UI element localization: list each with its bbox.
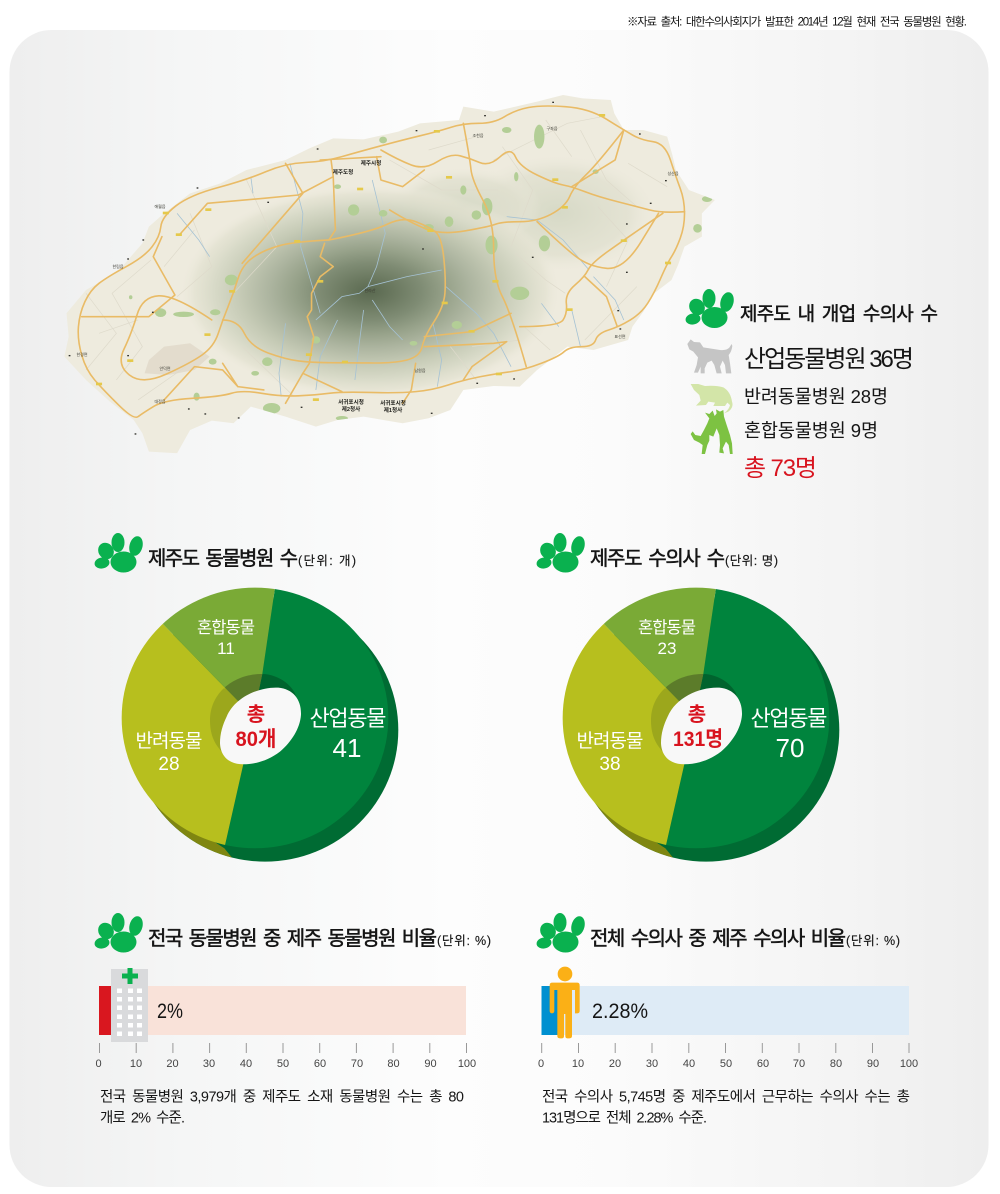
axis: 50 (277, 1058, 289, 1070)
axis: 100 (458, 1058, 476, 1070)
section: Jeju share of national veterinarians (536, 913, 918, 1126)
donut total: 131명 (673, 728, 723, 751)
map place labels: 한림읍 (112, 263, 124, 269)
bar value: 2.28% (592, 1000, 648, 1023)
icon: paw (94, 533, 145, 572)
description: 개로 2% 수준. (100, 1110, 185, 1126)
map place labels: 제1청사 (384, 406, 403, 414)
bar value: 2% (157, 1000, 183, 1023)
axis: 20 (166, 1058, 179, 1070)
donut total: 총 (688, 703, 706, 726)
slice label: industrial (310, 706, 386, 763)
map place labels: 제주도청 (333, 168, 353, 176)
icon: rat (691, 384, 733, 413)
unit: (단위: %) (846, 934, 900, 948)
icon: paw (94, 913, 145, 952)
slice label: industrial: 70 (776, 733, 804, 763)
axis: 70 (793, 1058, 805, 1070)
map of Jeju island (64, 95, 714, 453)
axis: 80 (387, 1058, 400, 1070)
slice label: mixed (197, 618, 255, 658)
icon: paw (536, 913, 587, 952)
section: veterinarians in Jeju (536, 533, 854, 870)
axis: 50 (720, 1058, 732, 1070)
map place labels: 제주시청 (361, 159, 381, 167)
slice label: industrial (750, 706, 828, 763)
axis: 100 (900, 1058, 918, 1070)
donut chart: hospitals (122, 588, 398, 862)
map place labels: 구좌읍 (546, 125, 558, 131)
bar chart: veterinarian share (538, 967, 918, 1070)
axis: 10 (130, 1058, 142, 1070)
map place labels: 조천읍 (472, 132, 484, 138)
axis (95, 1043, 476, 1070)
axis: 20 (609, 1058, 621, 1070)
section: Jeju share of national hospitals (94, 913, 491, 1126)
icon: cat (687, 339, 732, 373)
map place labels: 표선면 (614, 333, 626, 339)
description (542, 1088, 910, 1126)
map place labels (76, 125, 679, 414)
map place labels: 애월읍 (154, 203, 166, 209)
slice label: mixed: 23 (658, 639, 676, 658)
slice label: industrial: 산업동물 (310, 706, 386, 731)
axis: 30 (646, 1058, 658, 1070)
icon: hospital building (111, 968, 148, 1042)
slice label: companion (136, 730, 202, 775)
map place labels: 안덕면 (159, 365, 171, 371)
heading: 제주도 수의사 수 (590, 547, 725, 570)
axis: 90 (867, 1058, 879, 1070)
map place labels: 성산읍 (667, 170, 679, 176)
axis: 90 (424, 1058, 437, 1070)
map place labels: 서귀포시청 (338, 398, 364, 406)
slice label: companion: 38 (599, 754, 621, 775)
slice label: companion: 반려동물 (576, 730, 644, 752)
axis: 60 (314, 1058, 326, 1070)
donut total: 80개 (236, 728, 276, 751)
axis (538, 1043, 918, 1070)
description (100, 1088, 464, 1126)
icon: dogs (691, 409, 733, 454)
donut chart: veterinarians (562, 588, 840, 862)
donut total (236, 703, 276, 751)
axis: 30 (203, 1058, 215, 1070)
axis: 40 (240, 1058, 252, 1070)
unit: (단위: %) (437, 934, 491, 948)
axis: 10 (572, 1058, 584, 1070)
companion animal hospital count: 반려동물병원 28명 (744, 386, 888, 407)
slice label: mixed (638, 618, 696, 658)
axis: 0 (538, 1058, 544, 1070)
description: 131명으로 전체 2.28% 수준. (542, 1110, 707, 1126)
map place labels: 서귀포시청 (380, 399, 406, 407)
slice label: industrial: 산업동물 (750, 706, 828, 731)
legend: licensed veterinarians in Jeju (685, 289, 938, 482)
icon: paw (536, 533, 587, 572)
slice label: companion (576, 730, 644, 775)
unit: (단위: 개) (298, 554, 356, 568)
axis: 40 (683, 1058, 695, 1070)
bar chart: hospital share (95, 968, 476, 1070)
description: 전국 동물병원 3,979개 중 제주도 소재 동물병원 수는 총 80 (100, 1088, 464, 1106)
axis: 70 (351, 1058, 363, 1070)
road network (78, 106, 685, 417)
axis: 60 (757, 1058, 769, 1070)
icon: person (550, 967, 580, 1038)
map place labels: 한경면 (76, 351, 88, 357)
axis: 80 (830, 1058, 842, 1070)
slice label: mixed: 혼합동물 (638, 618, 696, 637)
section: hospitals in Jeju (94, 533, 413, 870)
slice label: mixed: 혼합동물 (197, 618, 255, 637)
description: 전국 수의사 5,745명 중 제주도에서 근무하는 수의사 수는 총 (542, 1088, 910, 1106)
unit: (단위: 명) (725, 554, 778, 568)
slice label: mixed: 11 (217, 639, 235, 658)
icon: paw (685, 289, 736, 328)
heading: 전체 수의사 중 제주 수의사 비율 (590, 927, 846, 950)
heading: 제주도 동물병원 수 (148, 547, 298, 570)
map place labels: 제2청사 (342, 405, 361, 413)
total count: 총 73명 (744, 455, 817, 482)
donut total (673, 703, 723, 751)
slice label: companion: 28 (158, 754, 180, 775)
source note: ※자료 출처: 대한수의사회지가 발표한 2014년 12월 현재 전국 동물병원 현황. (627, 14, 967, 28)
industrial animal hospital count: 산업동물병원 36명 (744, 346, 914, 373)
slice label: companion: 반려동물 (136, 730, 202, 752)
mixed animal hospital count: 혼합동물병원 9명 (744, 420, 878, 441)
axis: 0 (95, 1058, 102, 1070)
slice label: industrial: 41 (333, 733, 361, 763)
donut total: 총 (247, 703, 265, 726)
heading: 전국 동물병원 중 제주 동물병원 비율 (148, 927, 437, 950)
map place labels: 대정읍 (154, 398, 166, 404)
legend heading: 제주도 내 개업 수의사 수 (740, 303, 938, 325)
map place labels: 남원읍 (414, 367, 426, 373)
map place labels: 한라산 (364, 287, 376, 293)
